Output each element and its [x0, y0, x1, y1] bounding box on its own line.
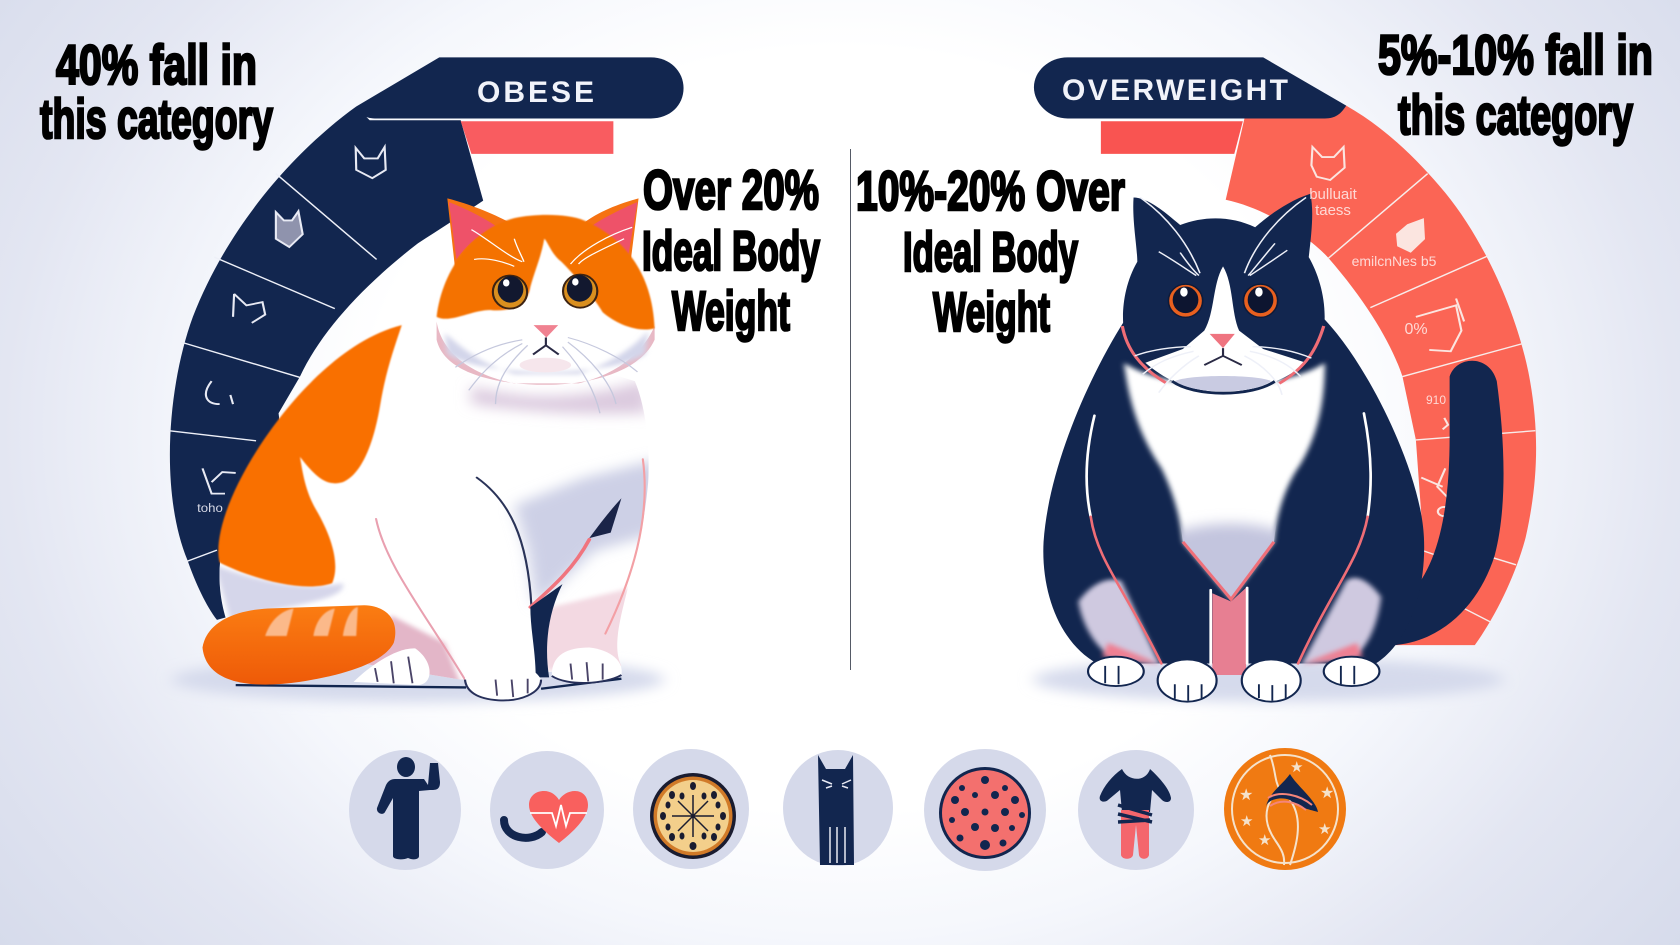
chest — [1124, 363, 1325, 611]
eyes — [1168, 284, 1203, 317]
callout: 10%-20% over ideal body weight: Weight — [933, 280, 1050, 343]
icon: person — [349, 750, 461, 870]
callout: 5%-10% fall in this category — [1378, 23, 1653, 146]
nose — [1210, 334, 1235, 348]
gauge labels: taess — [1315, 202, 1351, 219]
orange back patch — [218, 325, 402, 587]
icon: heart with pulse — [490, 751, 604, 869]
gauge labels: bulluait — [1309, 186, 1358, 203]
callout: over 20% ideal body weight — [642, 158, 820, 342]
haunch patches — [1078, 578, 1381, 666]
nose — [534, 325, 558, 338]
head — [1122, 194, 1325, 395]
gauge dividers — [1329, 174, 1535, 622]
gauge labels: emilcnNes b5 — [1352, 253, 1437, 269]
callout: over 20% ideal body weight: Ideal Body — [642, 219, 820, 282]
panel: overweight cat — [1033, 57, 1536, 702]
red bar — [461, 121, 613, 154]
tail — [202, 605, 395, 685]
callout: 40% fall in this category: this category — [40, 87, 273, 150]
body — [1043, 317, 1424, 664]
icon row — [349, 748, 1346, 871]
icon: orange badge: ★ — [1318, 820, 1331, 838]
gauge labels: 910 — [1426, 393, 1446, 407]
callout: over 20% ideal body weight: Weight — [672, 279, 790, 342]
icon: shirt and legs — [1078, 750, 1194, 870]
icon: cat silhouette — [783, 750, 893, 866]
gauge icons — [202, 147, 386, 494]
callout: 10%-20% over ideal body weight: 10%-20% Over — [856, 159, 1125, 222]
icon: orange badge: ★ — [1239, 785, 1253, 804]
icon: pizza with toppings — [633, 749, 749, 869]
red bar — [1101, 121, 1243, 154]
heading: overweight label: OVERWEIGHT — [1062, 74, 1288, 107]
gauge text: toho — [197, 501, 223, 515]
body — [220, 321, 649, 680]
paws — [1088, 657, 1379, 702]
callout: over 20% ideal body weight: Over 20% — [643, 158, 819, 221]
whiskers — [455, 338, 637, 413]
icon: orange badge: ★ — [1258, 831, 1271, 849]
leg lines — [376, 459, 645, 680]
gauge: coral arc — [1226, 106, 1536, 645]
paws — [354, 647, 622, 700]
whiskers — [1135, 197, 1311, 395]
gauge: navy arc — [170, 107, 483, 620]
legs — [1212, 588, 1246, 675]
ground shadow — [1033, 658, 1504, 702]
body shading — [214, 379, 659, 684]
callout: 10%-20% over ideal body weight — [856, 159, 1125, 343]
icon: orange badge — [1224, 748, 1346, 870]
icon: coral pizza — [924, 749, 1046, 871]
heading: obese label: OBESE — [477, 76, 594, 109]
callout: 40% fall in this category — [40, 33, 273, 150]
gauge dividers — [169, 174, 377, 561]
icon: orange badge: ★ — [1290, 758, 1303, 776]
label pill — [356, 57, 684, 118]
icon: orange badge: ★ — [1320, 783, 1334, 802]
gauge labels — [1309, 186, 1446, 407]
ground shadow — [171, 657, 664, 703]
label pill — [1034, 57, 1346, 118]
panel: obese cat — [169, 57, 684, 703]
gauge labels: 0% — [1404, 321, 1428, 338]
icon: orange badge: ★ — [1240, 812, 1253, 830]
gauge icons — [1311, 147, 1464, 501]
base shadow line — [236, 679, 621, 689]
eyes — [493, 276, 527, 309]
divider line — [850, 149, 852, 670]
callout: 10%-20% over ideal body weight: Ideal Body — [903, 220, 1078, 283]
tail — [1394, 361, 1504, 645]
callout: 40% fall in this category: 40% fall in — [56, 33, 257, 96]
head — [434, 198, 656, 413]
